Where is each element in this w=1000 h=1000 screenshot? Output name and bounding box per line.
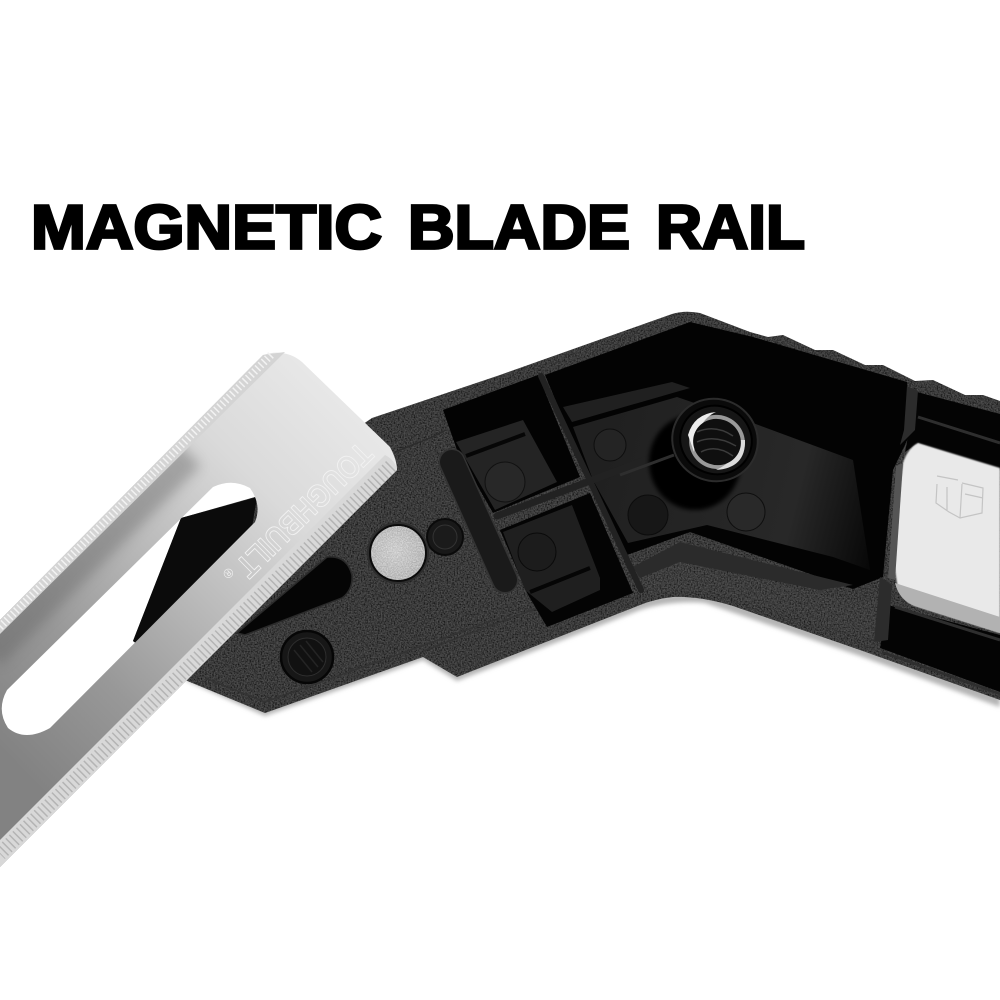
recessed slot xyxy=(237,557,352,635)
title: RAIL xyxy=(656,194,805,263)
title xyxy=(31,194,805,263)
upper shoulder recess line xyxy=(395,430,446,452)
lower ledge line xyxy=(205,605,545,702)
magnet xyxy=(368,523,428,583)
threaded insert nut xyxy=(649,387,769,510)
spare blade in storage xyxy=(888,443,1000,633)
ribs xyxy=(497,376,672,590)
handle body xyxy=(133,312,1000,713)
upper leg shading xyxy=(0,455,190,655)
handle divider post bottom xyxy=(874,577,892,642)
blade logo mark xyxy=(936,476,983,518)
pocket: lower left xyxy=(500,493,633,627)
utility knife handle xyxy=(133,312,1000,716)
pocket: lower wall bands xyxy=(633,542,880,642)
utility blade xyxy=(0,352,397,867)
front edge lip xyxy=(133,497,257,680)
infographic canvas xyxy=(0,204,1000,867)
rail black channels xyxy=(880,392,1000,692)
pocket: upper left xyxy=(443,375,580,513)
title: BLADE xyxy=(408,194,630,263)
nut rib xyxy=(620,455,674,475)
locating rib pill xyxy=(452,462,505,580)
upper bevel xyxy=(0,352,285,634)
handle underside shadow xyxy=(185,590,1000,716)
handle divider post top xyxy=(900,386,918,445)
title: MAGNETIC xyxy=(31,194,382,263)
ejector pin circle xyxy=(281,631,333,683)
pocket: main channel xyxy=(545,322,912,589)
blade body xyxy=(0,353,397,867)
TOUGHBUILT etched text: TOUGHBUILT xyxy=(229,435,380,585)
right rail lines xyxy=(882,417,1000,694)
lower bevel xyxy=(0,455,397,867)
small moulded circle xyxy=(427,519,463,555)
registered mark: ® xyxy=(219,565,237,582)
floor ejector marks xyxy=(594,429,626,461)
